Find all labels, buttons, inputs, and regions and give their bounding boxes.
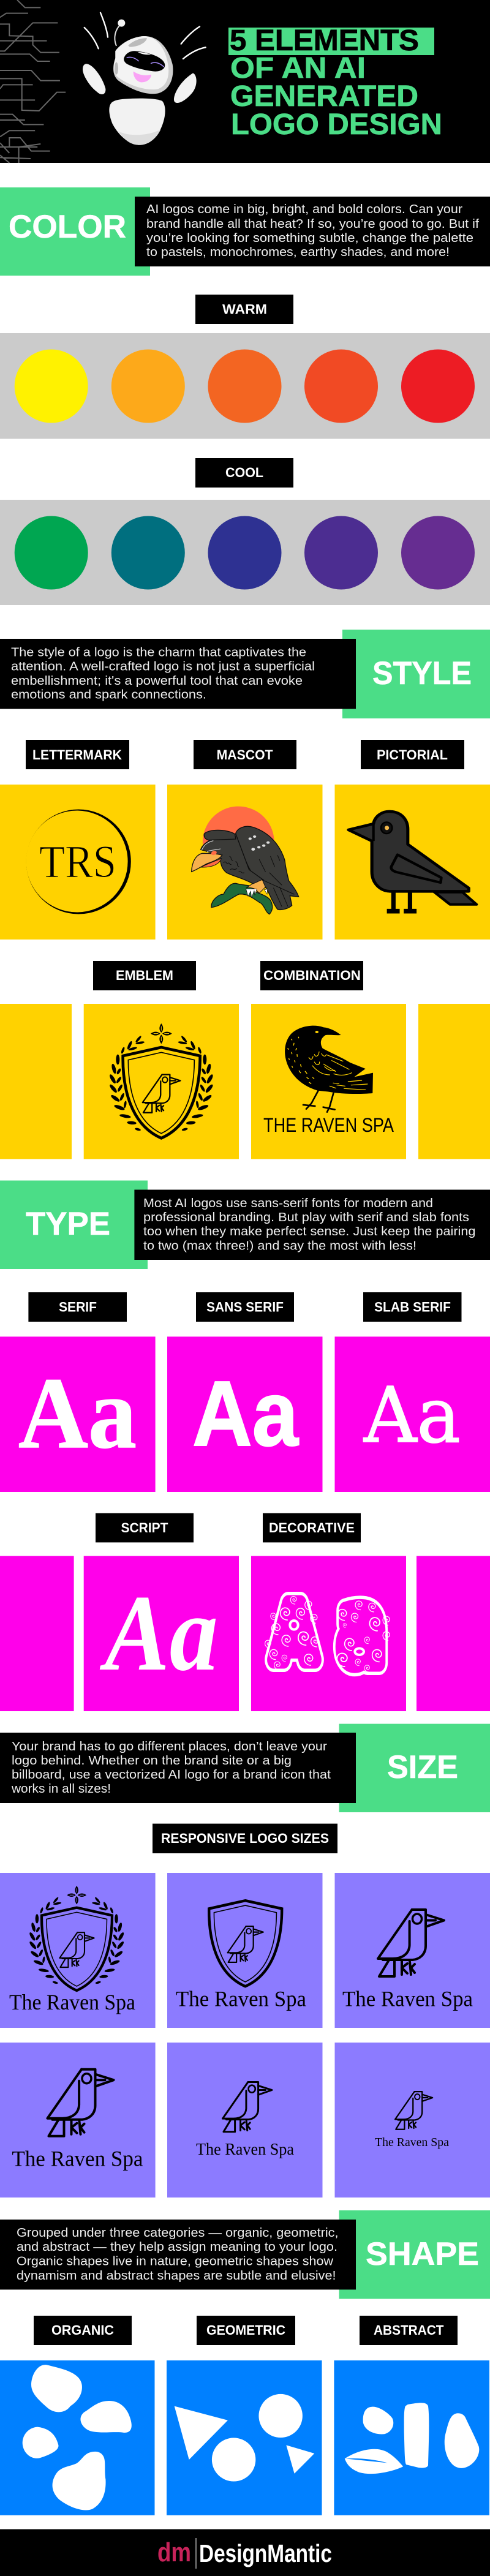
text block: color: AI logos come in big, bright, and bold colors. Can your	[146, 202, 462, 216]
title: LOGO DESIGN	[231, 108, 442, 141]
card: mascot raven logo	[167, 785, 322, 940]
text block: color: to pastels, monochromes, earthy shades, and more!	[146, 245, 450, 259]
card: serif sample: Aa	[18, 1357, 137, 1469]
tag: responsive logo sizes	[153, 1824, 337, 1853]
logo: DesignMantic	[157, 2537, 332, 2569]
card: slab serif sample	[334, 1336, 490, 1492]
tag: sans serif: SANS SERIF	[206, 1300, 284, 1314]
text block: size	[11, 1739, 331, 1796]
heading: color: COLOR	[9, 209, 126, 245]
card: sans serif sample	[167, 1336, 322, 1492]
tag: cool	[195, 458, 293, 488]
tag: mascot	[194, 740, 296, 769]
tag: organic: ORGANIC	[51, 2322, 114, 2338]
title: GENERATED	[230, 80, 418, 113]
card: decorative sample: a	[339, 1572, 385, 1686]
header banner	[0, 0, 490, 163]
tag: geometric: GEOMETRIC	[206, 2322, 285, 2338]
card: sans serif sample: Aa	[192, 1361, 299, 1465]
tag: mascot: MASCOT	[217, 747, 273, 763]
tag: organic	[34, 2316, 132, 2345]
tag: pictorial	[361, 740, 464, 769]
card: size 4 bird: The Raven Spa	[12, 2147, 143, 2171]
card: slab serif sample: Aa	[363, 1371, 461, 1460]
card: pictorial raven logo	[334, 785, 490, 940]
text block: color: you’re looking for something subtle, change the palette	[146, 231, 473, 245]
tag: script: SCRIPT	[121, 1520, 168, 1535]
panel: shape intro	[0, 2210, 490, 2299]
card: size 2 shield	[167, 1873, 322, 2028]
panel: size intro	[0, 1724, 490, 1812]
card: decorative sample: A	[273, 1589, 315, 1678]
tag: combination	[260, 961, 363, 990]
tag: lettermark: LETTERMARK	[32, 747, 122, 763]
tag: slab serif: SLAB SERIF	[374, 1300, 451, 1314]
panel: type intro	[0, 1181, 490, 1269]
panel: color intro	[0, 187, 490, 276]
logo: DesignMantic: DesignMantic	[199, 2539, 332, 2567]
tag: warm: WARM	[222, 301, 267, 317]
tag: pictorial: PICTORIAL	[377, 747, 448, 763]
card: decorative sample: A	[273, 1589, 315, 1678]
text block: shape	[17, 2226, 338, 2283]
text block: style: The style of a logo is the charm that captivates the	[11, 646, 306, 659]
tag: decorative	[263, 1513, 361, 1542]
tag: warm	[195, 295, 293, 324]
card: script sample	[84, 1556, 239, 1711]
card: size 5 bird	[167, 2043, 322, 2198]
tag: serif: SERIF	[59, 1300, 97, 1314]
card: lettermark logo: TRS	[39, 837, 116, 887]
card: size 6 bird	[334, 2043, 490, 2198]
footer	[0, 2529, 490, 2576]
tag: emblem: EMBLEM	[116, 968, 173, 983]
card: size 2 shield: The Raven Spa	[176, 1987, 306, 2011]
title	[228, 24, 442, 141]
text block: style	[11, 646, 315, 702]
panel: style intro	[0, 630, 490, 718]
heading: shape: SHAPE	[366, 2236, 479, 2272]
text block: style: attention. A well-crafted logo is not just a superficial	[11, 660, 315, 674]
text block: type: Most AI logos use sans-serif fonts for modern and	[143, 1196, 433, 1210]
card: size 6 bird: The Raven Spa	[375, 2136, 449, 2149]
text block: shape: Grouped under three categories — organic, geometric,	[17, 2226, 338, 2240]
text block: type: too when they make perfect sense. Just keep the pairing	[143, 1224, 475, 1238]
tag: responsive logo sizes: RESPONSIVE LOGO SIZES	[161, 1831, 329, 1846]
card: geometric shapes	[167, 2360, 322, 2515]
text block: size: works in all sizes!	[11, 1782, 111, 1796]
tag: script	[96, 1513, 194, 1542]
text block: style: emotions and spark connections.	[11, 688, 206, 702]
text block: style: embellishment; it's a powerful tool that can evoke	[11, 674, 303, 688]
card: serif sample	[0, 1336, 156, 1492]
text block: size: billboard, use a vectorized AI logo for a brand icon that	[12, 1768, 331, 1782]
warm color swatches	[0, 333, 490, 439]
tag: sans serif	[196, 1292, 294, 1322]
heading: type: TYPE	[26, 1206, 110, 1242]
tag: slab serif	[363, 1292, 462, 1322]
text block: type	[143, 1196, 475, 1253]
card: script sample: Aa	[99, 1572, 218, 1693]
title: 5 ELEMENTS	[230, 24, 419, 57]
card: size 3 bird	[334, 1873, 490, 2028]
tag: serif	[28, 1292, 127, 1322]
tag: combination: COMBINATION	[263, 968, 361, 983]
text block: size: Your brand has to go different places, don’t leave your	[12, 1739, 327, 1753]
text block: shape: and abstract — they help assign meaning to your logo.	[17, 2240, 337, 2254]
card: decorative sample	[251, 1556, 406, 1711]
tag: abstract	[360, 2316, 458, 2345]
text block: size: logo behind. Whether on the brand site or a big	[12, 1753, 292, 1768]
card: size 1 full crest: The Raven Spa	[9, 1990, 135, 2014]
tag: cool: COOL	[225, 465, 263, 480]
tag: decorative: DECORATIVE	[269, 1520, 355, 1535]
text block: color	[146, 202, 479, 259]
tag: emblem	[93, 961, 196, 990]
tag: lettermark	[26, 740, 129, 769]
icon: happy robot mascot	[83, 13, 206, 145]
card: size 4 bird	[0, 2043, 156, 2198]
card: decorative sample: a	[339, 1572, 385, 1686]
logo: DesignMantic: dm	[157, 2537, 191, 2567]
card: combination logo: THE RAVEN SPA	[263, 1114, 394, 1136]
card: emblem logo	[84, 1004, 239, 1159]
card: size 3 bird: The Raven Spa	[342, 1987, 473, 2011]
card: size 5 bird: The Raven Spa	[196, 2140, 294, 2158]
text block: shape: Organic shapes live in nature, geometric shapes show	[17, 2254, 333, 2269]
card: organic shapes	[0, 2360, 154, 2515]
cool color swatches	[0, 500, 490, 605]
heading: size: SIZE	[387, 1749, 458, 1785]
circuit line pattern	[0, 0, 66, 163]
heading: style: STYLE	[372, 655, 472, 691]
card: size 1 full crest	[0, 1873, 156, 2028]
tag: abstract: ABSTRACT	[374, 2322, 444, 2338]
card: abstract shapes	[334, 2360, 489, 2515]
card: lettermark logo	[0, 785, 156, 940]
title: OF AN AI	[230, 52, 366, 85]
text block: type: professional branding. But play with serif and slab fonts	[143, 1210, 469, 1224]
card: combination logo	[251, 1004, 406, 1159]
text block: shape: dynamism and abstract shapes are subtle and elusive!	[17, 2269, 336, 2283]
tag: geometric	[197, 2316, 295, 2345]
text block: type: to two (max three!) and say the most with less!	[143, 1238, 417, 1253]
text block: color: brand handle all that heat? If so, you’re good to go. But if	[146, 217, 479, 231]
